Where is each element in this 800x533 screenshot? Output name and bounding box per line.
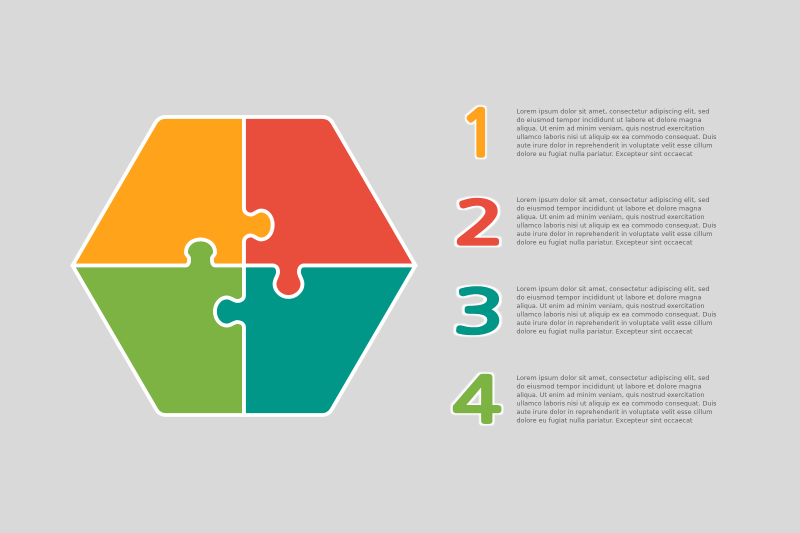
puzzle piece: green bottom left [72, 240, 244, 415]
text block 1: Lorem ipsum dolor sit amet, consectetur adipiscing elit, sed [516, 108, 710, 116]
text block 1: aliqua. Ut enim ad minim veniam, quis nostrud exercitation [516, 124, 704, 132]
puzzle piece: teal bottom right [215, 266, 416, 415]
text block 2: dolore eu fugiat nulla pariatur. Excepteur sint occaecat [516, 238, 693, 246]
text block 1: dolore eu fugiat nulla pariatur. Excepteur sint occaecat [516, 150, 693, 158]
text block 2: ullamco laboris nisi ut aliquip ex ea commodo consequat. Duis [516, 222, 717, 230]
text block 3: aute irure dolor in reprehenderit in voluptate velit esse cillum [516, 319, 712, 327]
text block 3: Lorem ipsum dolor sit amet, consectetur adipiscing elit, sed [516, 285, 710, 293]
text block 4: Lorem ipsum dolor sit amet, consectetur adipiscing elit, sed [516, 374, 710, 382]
text block 1 [516, 108, 717, 158]
step 1 [460, 102, 717, 164]
step 3 [454, 283, 717, 342]
step 4 [453, 370, 717, 431]
text block 4: do eiusmod tempor incididunt ut labore et dolore magna [516, 382, 702, 390]
numeral 3: 3 [454, 283, 503, 342]
text block 3: ullamco laboris nisi ut aliquip ex ea commodo consequat. Duis [516, 310, 717, 318]
text block 2: aute irure dolor in reprehenderit in voluptate velit esse cillum [516, 230, 712, 238]
text block 1: ullamco laboris nisi ut aliquip ex ea commodo consequat. Duis [516, 133, 717, 141]
numeral 2: 2 [455, 195, 504, 253]
text block 4: ullamco laboris nisi ut aliquip ex ea commodo consequat. Duis [516, 400, 717, 408]
numeral 4: 4 [453, 370, 501, 431]
text block 4: aute irure dolor in reprehenderit in voluptate velit esse cillum [516, 408, 712, 416]
text block 1: aute irure dolor in reprehenderit in voluptate velit esse cillum [516, 142, 712, 150]
text block 1: do eiusmod tempor incididunt ut labore et dolore magna [516, 116, 702, 124]
text block 2: Lorem ipsum dolor sit amet, consectetur adipiscing elit, sed [516, 196, 710, 204]
text block 3: do eiusmod tempor incididunt ut labore et dolore magna [516, 294, 702, 302]
puzzle piece: orange top left [72, 117, 273, 266]
text block 2: do eiusmod tempor incididunt ut labore et dolore magna [516, 204, 702, 212]
text block 3: dolore eu fugiat nulla pariatur. Excepteur sint occaecat [516, 328, 693, 336]
text block 3 [516, 285, 717, 336]
text block 3: aliqua. Ut enim ad minim veniam, quis nostrud exercitation [516, 302, 704, 310]
text block 4: aliqua. Ut enim ad minim veniam, quis nostrud exercitation [516, 391, 704, 399]
text block 4 [516, 374, 717, 424]
step 2 [455, 195, 717, 253]
text block 2: aliqua. Ut enim ad minim veniam, quis nostrud exercitation [516, 213, 704, 221]
puzzle piece: red top right [244, 117, 416, 297]
numeral 1: 1 [460, 102, 498, 164]
puzzle hexagon [72, 117, 416, 415]
text block 2 [516, 196, 717, 246]
text block 4: dolore eu fugiat nulla pariatur. Excepteur sint occaecat [516, 416, 693, 424]
